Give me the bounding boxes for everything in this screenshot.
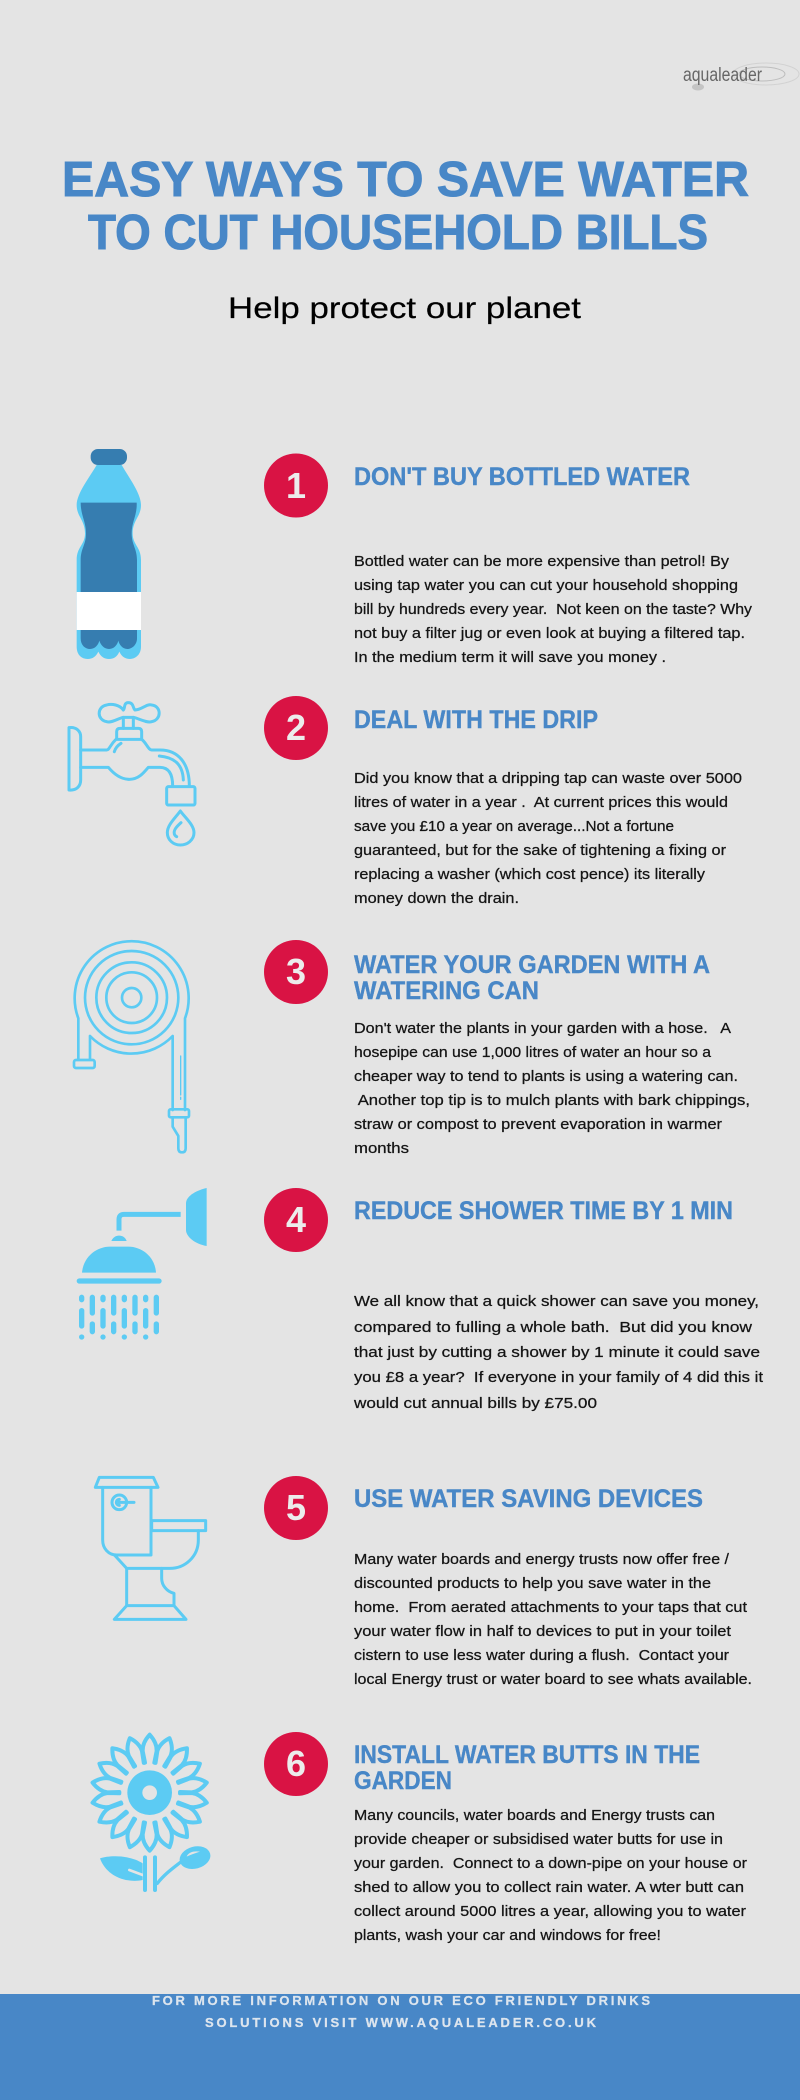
badge: number 3: 3: [286, 951, 306, 992]
text block: step 3: hosepipe can use 1,000 litres of water an hour so a: [354, 1044, 712, 1061]
title: [62, 153, 749, 260]
badge: number 3: [264, 940, 328, 1004]
text block: step 2: litres of water in a year . At current prices this would: [354, 794, 728, 811]
icon: shower head: [77, 1188, 207, 1340]
badge: number 5: [264, 1476, 328, 1540]
badge: number 1: [264, 454, 328, 518]
text block: step 1: bill by hundreds every year. Not keen on the taste? Why: [354, 601, 753, 618]
text block: step 3: months: [354, 1140, 409, 1157]
footer text: [152, 1993, 650, 2030]
panel: step 3 watering can: [74, 940, 750, 1157]
badge: number 4: [264, 1188, 328, 1252]
text block: step 6: collect around 5000 litres a year, allowing you to water: [354, 1903, 746, 1920]
heading: step 3: [354, 951, 710, 1005]
panel: step 6 water butts: [91, 1732, 747, 1944]
badge: number 5: 5: [286, 1487, 306, 1528]
heading: step 3: WATER YOUR GARDEN WITH A: [354, 951, 710, 979]
panel: step 2 drip: [69, 696, 742, 907]
text block: step 2: Did you know that a dripping tap can waste over 5000: [354, 770, 742, 787]
text block: step 2: [354, 770, 742, 907]
heading: step 1: DON'T BUY BOTTLED WATER: [354, 463, 690, 491]
subtitle: Help protect our planet: [228, 292, 582, 325]
text block: step 3: [354, 1020, 750, 1157]
text block: step 4: would cut annual bills by £75.00: [353, 1395, 597, 1412]
text block: step 2: save you £10 a year on average...Not a fortune: [354, 818, 674, 835]
icon: toilet: [95, 1477, 206, 1619]
icon: sunflower: [91, 1735, 213, 1890]
text block: step 5: your water flow in half to devices to put in your toilet: [354, 1623, 732, 1640]
heading: step 5: USE WATER SAVING DEVICES: [354, 1485, 703, 1513]
text block: step 3: Another top tip is to mulch plants with bark chippings,: [354, 1092, 750, 1109]
text block: step 4: compared to fulling a whole bath. But did you know: [354, 1319, 752, 1336]
heading: step 2: DEAL WITH THE DRIP: [354, 706, 598, 734]
icon: coiled hose: [74, 941, 189, 1152]
badge: number 2: [264, 696, 328, 760]
badge: number 4: 4: [286, 1199, 306, 1240]
text block: step 5: discounted products to help you save water in the: [354, 1575, 711, 1592]
text block: step 2: guaranteed, but for the sake of tightening a fixing or: [354, 842, 726, 859]
text block: step 1: In the medium term it will save you money .: [354, 649, 666, 666]
text block: step 6: [354, 1807, 747, 1944]
text block: step 2: replacing a washer (which cost pence) its literally: [354, 866, 706, 883]
text block: step 6: provide cheaper or subsidised water butts for use in: [354, 1831, 723, 1848]
text block: step 1: Bottled water can be more expensive than petrol! By: [354, 553, 730, 570]
panel: step 4 shower: [77, 1188, 764, 1412]
title: EASY WAYS TO SAVE WATER: [62, 153, 749, 207]
text block: step 5: Many water boards and energy trusts now offer free /: [354, 1551, 730, 1568]
text block: step 4: you £8 a year? If everyone in your family of 4 did this it: [354, 1369, 764, 1386]
text block: step 1: using tap water you can cut your household shopping: [354, 577, 738, 594]
text block: step 6: your garden. Connect to a down-pipe on your house or: [354, 1855, 747, 1872]
text block: step 2: money down the drain.: [354, 890, 519, 907]
text block: step 3: cheaper way to tend to plants is using a watering can.: [354, 1068, 738, 1085]
badge: number 6: [264, 1732, 328, 1796]
text block: step 4: that just by cutting a shower by 1 minute it could save: [354, 1344, 760, 1361]
heading: step 4: REDUCE SHOWER TIME BY 1 MIN: [354, 1197, 733, 1225]
heading: step 6: GARDEN: [354, 1767, 452, 1795]
heading: step 6: INSTALL WATER BUTTS IN THE: [354, 1741, 700, 1769]
badge: number 6: 6: [286, 1743, 306, 1784]
text block: step 1: [354, 553, 753, 666]
footer band: [0, 1993, 800, 2100]
text block: step 1: not buy a filter jug or even look at buying a filtered tap.: [354, 625, 745, 642]
panel: step 5 devices: [95, 1476, 752, 1688]
text block: step 4: [353, 1293, 764, 1412]
logo: aqualeader: aqualeader: [683, 65, 763, 86]
badge: number 1: 1: [286, 465, 306, 506]
text block: step 3: Don't water the plants in your garden with a hose. A: [354, 1020, 731, 1037]
title: TO CUT HOUSEHOLD BILLS: [88, 206, 708, 260]
badge: number 2: 2: [286, 707, 306, 748]
text block: step 5: cistern to use less water during a flush. Contact your: [354, 1647, 729, 1664]
icon: dripping tap: [69, 703, 195, 845]
text block: step 6: Many councils, water boards and Energy trusts can: [354, 1807, 715, 1824]
footer text: FOR MORE INFORMATION ON OUR ECO FRIENDLY DRINKS: [152, 1993, 650, 2008]
text block: step 5: home. From aerated attachments to your taps that cut: [354, 1599, 748, 1616]
logo: aqualeader: [683, 63, 799, 90]
text block: step 4: We all know that a quick shower can save you money,: [354, 1293, 759, 1310]
text block: step 6: shed to allow you to collect rain water. A wter butt can: [354, 1879, 744, 1896]
text block: step 3: straw or compost to prevent evaporation in warmer: [354, 1116, 722, 1133]
heading: step 3: WATERING CAN: [354, 977, 539, 1005]
text block: step 5: [354, 1551, 752, 1688]
text block: step 5: local Energy trust or water board to see whats available.: [354, 1671, 752, 1688]
footer text: SOLUTIONS VISIT WWW.AQUALEADER.CO.UK: [205, 2015, 597, 2030]
panel: step 1 bottled water: [77, 449, 753, 666]
icon: plastic bottle: [77, 449, 141, 659]
heading: step 6: [354, 1741, 700, 1795]
text block: step 6: plants, wash your car and windows for free!: [354, 1927, 661, 1944]
